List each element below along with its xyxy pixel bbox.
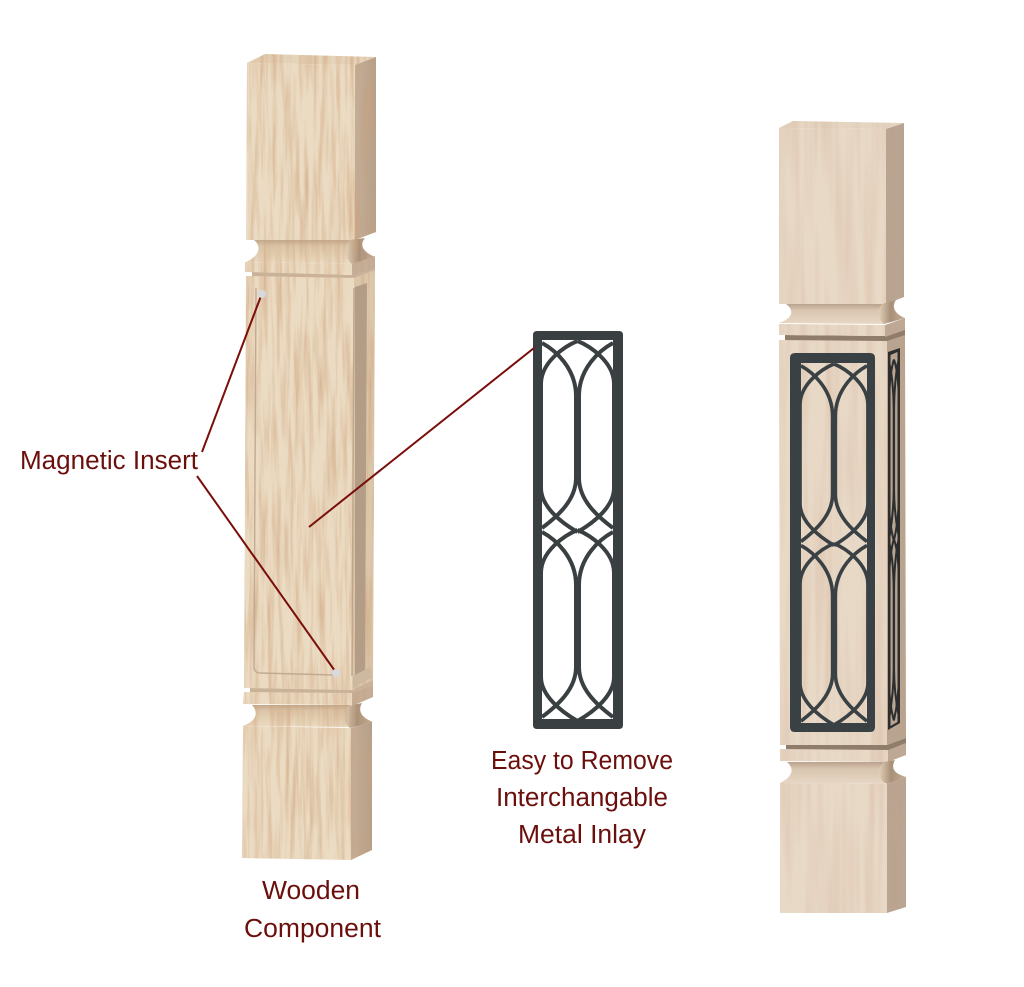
front inlay panel — [790, 353, 875, 732]
assembled post with inlay — [779, 121, 906, 913]
lower turned neck — [780, 760, 906, 784]
callout lines — [197, 296, 534, 671]
front inlay frame — [790, 353, 875, 732]
upper turned neck — [246, 238, 375, 264]
upper groove — [252, 267, 375, 280]
label: Easy to Remove Interchangable Metal Inlay — [491, 747, 673, 849]
label: Easy to Remove Interchangable Metal Inlay: Metal Inlay — [518, 821, 646, 849]
inlay frame — [533, 331, 623, 729]
front lattice — [800, 364, 868, 725]
upper block — [779, 121, 904, 304]
recess outline — [254, 288, 334, 675]
wooden component post — [242, 54, 376, 860]
upper plinth — [245, 256, 375, 276]
lower recess lip — [353, 667, 372, 688]
lower groove — [250, 680, 373, 696]
magnetic insert dot: bottom — [332, 669, 340, 677]
upper plinth — [779, 318, 905, 337]
lower plinth — [243, 686, 373, 706]
upper groove — [785, 329, 905, 342]
main shaft — [779, 335, 906, 745]
lower groove — [786, 738, 906, 751]
side lattice — [889, 358, 899, 722]
label: Easy to Remove Interchangable Metal Inlay: Easy to Remove — [491, 747, 673, 775]
label: Wooden Component — [244, 877, 381, 943]
lower block — [242, 722, 372, 860]
label: Easy to Remove Interchangable Metal Inlay: Interchangable — [496, 784, 668, 812]
lower turned neck — [243, 703, 373, 728]
label: Wooden Component: Wooden — [262, 877, 360, 905]
side inlay panel — [888, 348, 900, 730]
upper turned neck — [779, 300, 905, 324]
upper block — [246, 54, 376, 240]
magnetic insert dot: top — [258, 290, 266, 298]
side recess — [355, 283, 367, 678]
label: Wooden Component: Component — [244, 915, 381, 943]
metal inlay — [533, 331, 623, 729]
main shaft with recess — [244, 270, 375, 690]
lattice pattern — [541, 341, 614, 721]
label: Magnetic Insert: Magnetic Insert — [20, 447, 198, 475]
lower plinth — [780, 743, 906, 762]
side inlay frame — [888, 348, 900, 730]
lower block — [780, 777, 906, 913]
